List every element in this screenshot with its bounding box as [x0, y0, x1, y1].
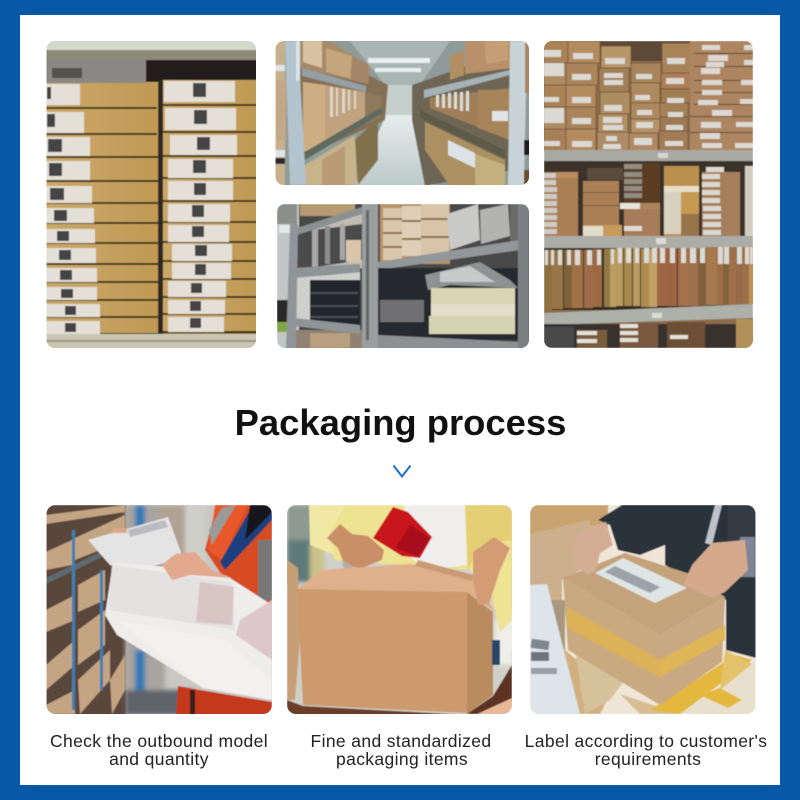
- photo: three shelves of component boxes: [544, 41, 754, 349]
- heading: Packaging process: [235, 402, 566, 443]
- second shelf: [544, 161, 753, 237]
- small white labels on top boxes: [544, 45, 753, 149]
- carton left face: [563, 578, 660, 705]
- carton top: [297, 564, 495, 612]
- right column rows: [158, 80, 257, 336]
- jacket: [330, 505, 512, 632]
- photo: stacked labelled boxes: [46, 40, 257, 350]
- carton top: [563, 553, 725, 635]
- bottom shelf: [544, 324, 753, 348]
- photo: applying shipping label: [530, 505, 756, 715]
- second shelf board: [544, 236, 753, 248]
- caption: check model and quantity: Check the outbound model: [50, 731, 268, 751]
- lower right cell: [378, 268, 520, 340]
- right hand: [473, 537, 510, 605]
- photo: metal racks with foil bags and boxes: [277, 204, 530, 350]
- carton side: [467, 592, 493, 714]
- floor: [355, 115, 436, 186]
- caption: customer labels: Label according to customer's: [525, 731, 767, 751]
- shelving bins: [46, 505, 125, 714]
- basket: [105, 562, 272, 700]
- hand: [162, 552, 232, 580]
- side boxes: [287, 560, 300, 700]
- vest: [205, 505, 272, 605]
- carton right face: [660, 597, 725, 705]
- tape strip: [415, 560, 473, 581]
- tape dispenser: [373, 507, 432, 558]
- icon: down chevron: [394, 466, 410, 476]
- top-right stack: [690, 41, 753, 151]
- carton front: [297, 589, 467, 713]
- upper right cell: [380, 204, 450, 264]
- photo: checking order with basket: [46, 505, 273, 715]
- floor: [287, 700, 467, 715]
- caption: fine packaging: Fine and standardized: [311, 731, 491, 751]
- first shelf board: [544, 150, 753, 161]
- uprights: [286, 224, 298, 349]
- lower left cell: [296, 272, 361, 320]
- photo: sealing carton with tape: [287, 505, 513, 715]
- right hand: [683, 540, 748, 598]
- back cartons: [530, 505, 608, 534]
- label: [595, 558, 687, 603]
- receipt: [530, 584, 580, 714]
- top shelf boxes: [544, 41, 692, 151]
- caption: check model and quantity: and quantity: [109, 749, 209, 769]
- left shelves: [275, 40, 285, 186]
- upper left cell: [299, 214, 362, 278]
- jacket: [598, 505, 756, 658]
- paper: [88, 517, 183, 572]
- yellow tape band: [567, 607, 660, 677]
- right shelves: [412, 66, 510, 185]
- folders row: [544, 248, 726, 310]
- caption: fine packaging: packaging items: [336, 749, 468, 769]
- floor boxes and yellow tape: [575, 650, 625, 714]
- left hand: [573, 522, 613, 575]
- photo: warehouse aisle with shelves: [275, 40, 530, 186]
- third shelf board: [544, 304, 753, 325]
- left forearm and hand: [327, 524, 384, 568]
- red trousers: [176, 686, 272, 715]
- left column rows: [46, 83, 161, 336]
- caption: customer labels: requirements: [595, 749, 701, 769]
